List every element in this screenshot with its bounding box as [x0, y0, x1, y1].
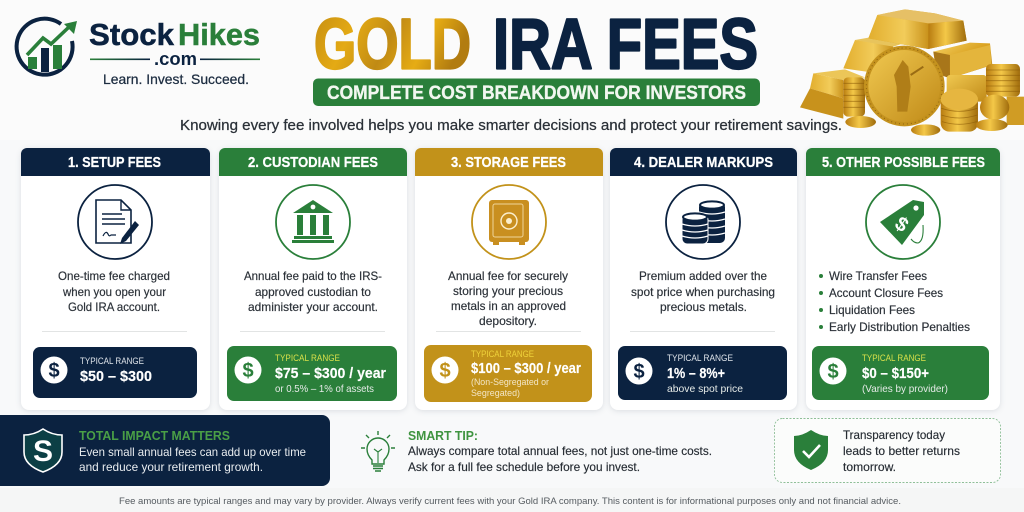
description: spot price when purchasing: [631, 285, 775, 299]
callout text: Transparency today: [843, 428, 945, 442]
typical range box: [424, 345, 592, 402]
panel: setup fees: [21, 148, 210, 410]
description: Premium added over the: [639, 269, 767, 283]
impact text: Even small annual fees can add up over time: [79, 445, 306, 459]
header: storage fees: 3. STORAGE FEES: [451, 155, 566, 171]
description: depository.: [479, 314, 537, 328]
logo wordmark: [89, 17, 260, 87]
icon: logo chart in circle: [17, 19, 77, 75]
fee list: Wire Transfer Fees: [829, 269, 927, 283]
panel: storage fees: [415, 148, 603, 410]
description: approved custodian to: [255, 285, 371, 299]
footer disclaimer: Fee amounts are typical ranges and may vary by provider. Always verify current fees with your Gold IRA company. This content is for informational purposes only and not financial advice.: [119, 496, 901, 507]
typical range box: Segregated): [471, 388, 520, 399]
typical range box: TYPICAL RANGE: [667, 353, 733, 363]
header: custodian fees: [219, 148, 407, 176]
logo wordmark: Learn. Invest. Succeed.: [103, 71, 249, 87]
typical range box: $: [827, 361, 839, 383]
typical range box: $75 – $300 / year: [275, 366, 386, 382]
icon: price tag: $: [891, 213, 912, 237]
subtitle banner: COMPLETE COST BREAKDOWN FOR INVESTORS: [327, 82, 746, 104]
description: when you open your: [62, 285, 166, 299]
typical range box: $: [633, 361, 645, 383]
description: Gold IRA account.: [68, 300, 160, 314]
tip text: [408, 428, 712, 474]
icon: coin stacks: [666, 185, 740, 259]
typical range box: $: [48, 360, 60, 382]
icon: signed document: [78, 185, 152, 259]
panel: custodian fees: [219, 148, 407, 410]
logo: StockHikes: [17, 17, 260, 87]
typical range box: $100 – $300 / year: [471, 361, 581, 377]
description: Annual fee paid to the IRS-: [244, 269, 382, 283]
description: [631, 269, 775, 314]
typical range box: or 0.5% – 1% of assets: [275, 383, 374, 395]
typical range box: (Varies by provider): [862, 383, 948, 395]
tip text: Always compare total annual fees, not just one-time costs.: [408, 444, 712, 458]
callout text: tomorrow.: [843, 460, 896, 474]
typical range box: $0 – $150+: [862, 366, 929, 382]
typical range box: TYPICAL RANGE: [471, 349, 534, 359]
logo wordmark: Stock: [89, 17, 175, 52]
impact text: [79, 428, 306, 474]
tip text: SMART TIP:: [408, 428, 478, 443]
panel: dealer markups: [610, 148, 797, 410]
icon: bank building: [276, 185, 350, 259]
fee list: [819, 269, 970, 334]
typical range box: above spot price: [667, 383, 743, 395]
description: administer your account.: [248, 300, 378, 314]
panel: smart tip: [361, 428, 712, 474]
header: storage fees: [415, 148, 603, 176]
callout text: [843, 428, 960, 474]
header: custodian fees: 2. CUSTODIAN FEES: [248, 155, 378, 171]
fee list: Account Closure Fees: [829, 286, 943, 300]
icon: lightbulb: [361, 431, 395, 471]
header: dealer markups: 4. DEALER MARKUPS: [634, 155, 773, 171]
typical range box: (Non-Segregated or: [471, 377, 549, 388]
typical range box: $: [439, 360, 451, 382]
icon: shield with dollar: [24, 429, 62, 472]
impact text: TOTAL IMPACT MATTERS: [79, 428, 230, 443]
panel: total impact matters: [0, 415, 330, 486]
tip text: Ask for a full fee schedule before you invest.: [408, 460, 640, 474]
title: [314, 6, 758, 84]
icon: shield with dollar: S: [33, 435, 53, 468]
icon: safe: [472, 185, 546, 259]
panel: transparency callout: [774, 418, 1000, 482]
icon: price tag: [866, 185, 940, 259]
header: other possible fees: [806, 148, 1000, 176]
description: Annual fee for securely: [448, 269, 568, 283]
typical range box: TYPICAL RANGE: [80, 356, 144, 366]
intro sentence: Knowing every fee involved helps you make smarter decisions and protect your retirement savings.: [180, 118, 842, 134]
logo wordmark: .com: [154, 49, 197, 69]
description: [448, 269, 568, 328]
title: IRA FEES: [493, 6, 758, 84]
description: [58, 269, 170, 314]
header: other possible fees: 5. OTHER POSSIBLE FEES: [822, 155, 985, 171]
description: One-time fee charged: [58, 269, 170, 283]
callout text: leads to better returns: [843, 444, 960, 458]
typical range box: $50 – $300: [80, 369, 152, 385]
typical range box: [227, 346, 397, 401]
description: metals in an approved: [451, 299, 566, 313]
typical range box: $: [242, 360, 254, 382]
description: [244, 269, 382, 314]
fee list: Early Distribution Penalties: [829, 320, 970, 334]
icon: shield with check: [794, 430, 828, 470]
typical range box: [33, 347, 197, 398]
header: setup fees: 1. SETUP FEES: [68, 155, 161, 171]
impact text: and reduce your retirement growth.: [79, 460, 263, 474]
typical range box: TYPICAL RANGE: [275, 353, 340, 363]
typical range box: [618, 346, 787, 400]
fee list: Liquidation Fees: [829, 303, 915, 317]
typical range box: [812, 346, 989, 400]
logo wordmark: Hikes: [178, 17, 260, 52]
illustration: gold bars and coin: [800, 9, 1024, 136]
description: storing your precious: [453, 284, 563, 298]
header: setup fees: [21, 148, 210, 176]
description: precious metals.: [660, 300, 747, 314]
typical range box: 1% – 8%+: [667, 366, 725, 382]
header: dealer markups: [610, 148, 797, 176]
typical range box: TYPICAL RANGE: [862, 353, 926, 363]
title: GOLD: [314, 6, 471, 84]
panel: other possible fees: [806, 148, 1000, 410]
